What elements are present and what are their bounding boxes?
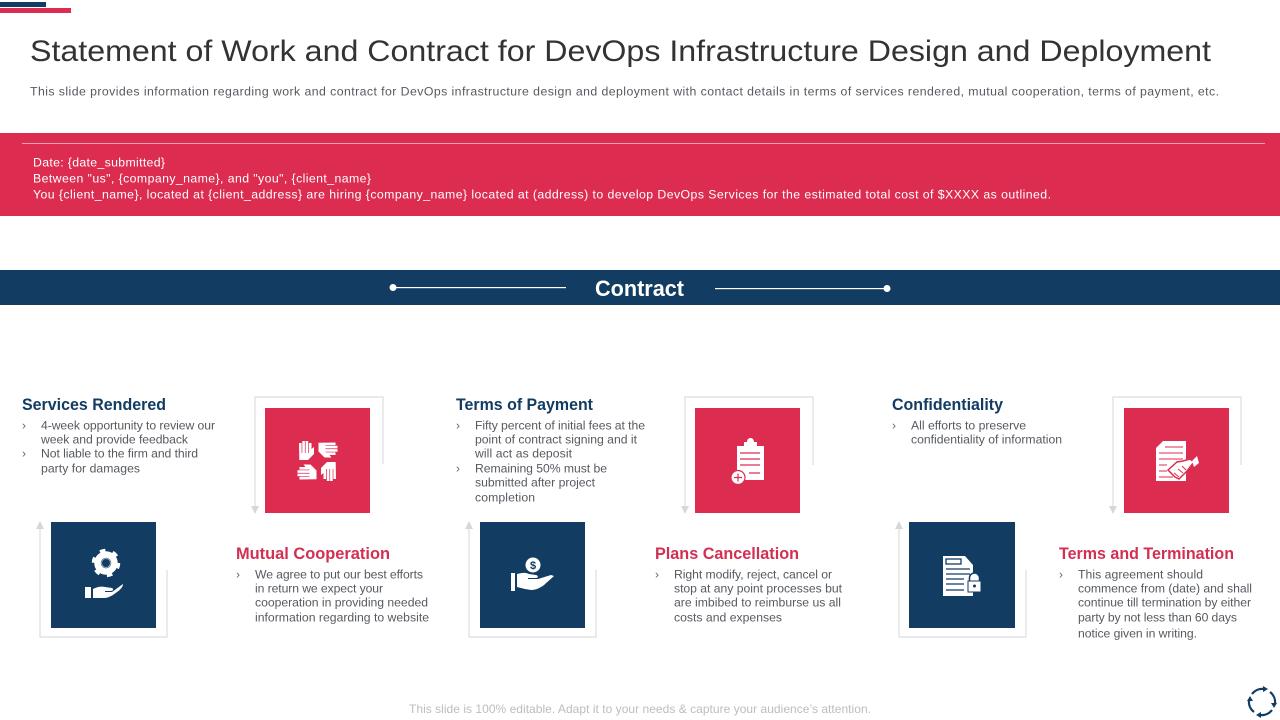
arrow frame: confidentiality to termination [1109, 397, 1241, 514]
panel: terms of payment: will act as deposit [474, 446, 573, 460]
panel: terms of payment: submitted after project [475, 476, 596, 490]
panel: terms of payment: › [456, 462, 460, 476]
panel: contract details banner: Date: {date_submitted} [33, 156, 165, 170]
panel: mutual cooperation: information regarding to website [255, 610, 429, 624]
panel: terms and termination: commence from (date) and shall [1078, 582, 1252, 596]
section header: contract: Contract [595, 276, 685, 301]
panel: services rendered: 4-week opportunity to review our [41, 418, 215, 432]
arrow frame: mutual to services [36, 521, 167, 637]
panel: services rendered [22, 395, 215, 476]
arrow frame: services to mutual [251, 397, 383, 514]
panel: terms and termination: This agreement should [1078, 568, 1203, 582]
icon: joined hands [265, 408, 370, 513]
icon: clipboard with plus [695, 408, 800, 513]
panel: confidentiality: Confidentiality [892, 395, 1004, 414]
panel: terms of payment: › [456, 418, 460, 432]
panel: plans cancellation: › [655, 568, 659, 582]
icon: hand with coin: $ [530, 560, 536, 572]
subtitle: This slide provides information regarding work and contract for DevOps infrastructure design and deployment with contact details in terms of services rendered, mutual cooperation, terms of payment, etc. [30, 84, 1219, 98]
panel: terms and termination: Terms and Termination [1059, 544, 1234, 563]
panel: terms and termination: party by not less than 60 days [1078, 610, 1237, 624]
panel: terms of payment: Fifty percent of initial fees at the [475, 418, 645, 432]
panel: services rendered: Services Rendered [22, 395, 166, 414]
icon: refresh cycle [1247, 686, 1277, 718]
panel: services rendered: › [22, 418, 26, 432]
panel: services rendered: week and provide feedback [40, 432, 189, 446]
panel: terms of payment: Terms of Payment [456, 395, 593, 414]
section header: contract [0, 270, 1280, 305]
panel: plans cancellation: costs and expenses [674, 610, 782, 624]
panel: mutual cooperation: We agree to put our best efforts [255, 568, 423, 582]
panel: terms and termination [1059, 544, 1252, 640]
title: Statement of Work and Contract for DevOps Infrastructure Design and Deployment [30, 35, 1212, 68]
panel: terms and termination: notice given in writing. [1078, 626, 1197, 640]
panel: services rendered: › [22, 446, 26, 460]
icon: document with padlock [909, 522, 1015, 628]
panel: mutual cooperation [236, 544, 429, 624]
panel: terms of payment: Remaining 50% must be [475, 462, 607, 476]
panel: confidentiality: › [892, 418, 896, 432]
panel: confidentiality: confidentiality of information [911, 432, 1062, 446]
arrow frame: termination to confidentiality [895, 521, 1026, 637]
icon: hand with coin [480, 522, 585, 628]
arrow frame: cancellation to payment [465, 521, 596, 637]
panel: services rendered: party for damages [41, 462, 140, 476]
panel: confidentiality [892, 395, 1062, 446]
accent bars [0, 2, 71, 13]
panel: terms of payment: completion [475, 490, 535, 504]
icon: contract with handshake [1124, 408, 1229, 513]
panel: confidentiality: All efforts to preserve [911, 418, 1026, 432]
panel: contract details banner [0, 133, 1280, 216]
panel: terms and termination: continue till termination by either [1078, 596, 1251, 610]
icon: hand with gear [51, 522, 156, 628]
panel: terms of payment: point of contract signing and it [475, 432, 638, 446]
arrow frame: payment to cancellation [681, 397, 813, 514]
panel: mutual cooperation: › [236, 568, 240, 582]
footer note: This slide is 100% editable. Adapt it to your needs & capture your audience’s attention. [409, 702, 871, 716]
panel: mutual cooperation: cooperation in providing needed [255, 596, 428, 610]
panel: contract details banner: Between "us", {company_name}, and "you", {client_name} [33, 172, 371, 186]
panel: mutual cooperation: in return we expect your [255, 582, 383, 596]
panel: plans cancellation [655, 544, 843, 624]
panel: plans cancellation: Right modify, reject, cancel or [674, 568, 832, 582]
panel: plans cancellation: are imbibed to reimburse us all [674, 596, 841, 610]
panel: plans cancellation: Plans Cancellation [655, 544, 799, 563]
panel: plans cancellation: stop at any point processes but [674, 582, 843, 596]
panel: mutual cooperation: Mutual Cooperation [236, 544, 390, 563]
panel: contract details banner: You {client_name}, located at {client_address} are hiring {company_name} located at (address) to develop DevOps Services for the estimated total cost of $XXXX as outlined. [33, 188, 1051, 202]
panel: services rendered: Not liable to the firm and third [41, 446, 198, 460]
panel: terms of payment [456, 395, 645, 504]
panel: terms and termination: › [1059, 568, 1063, 582]
